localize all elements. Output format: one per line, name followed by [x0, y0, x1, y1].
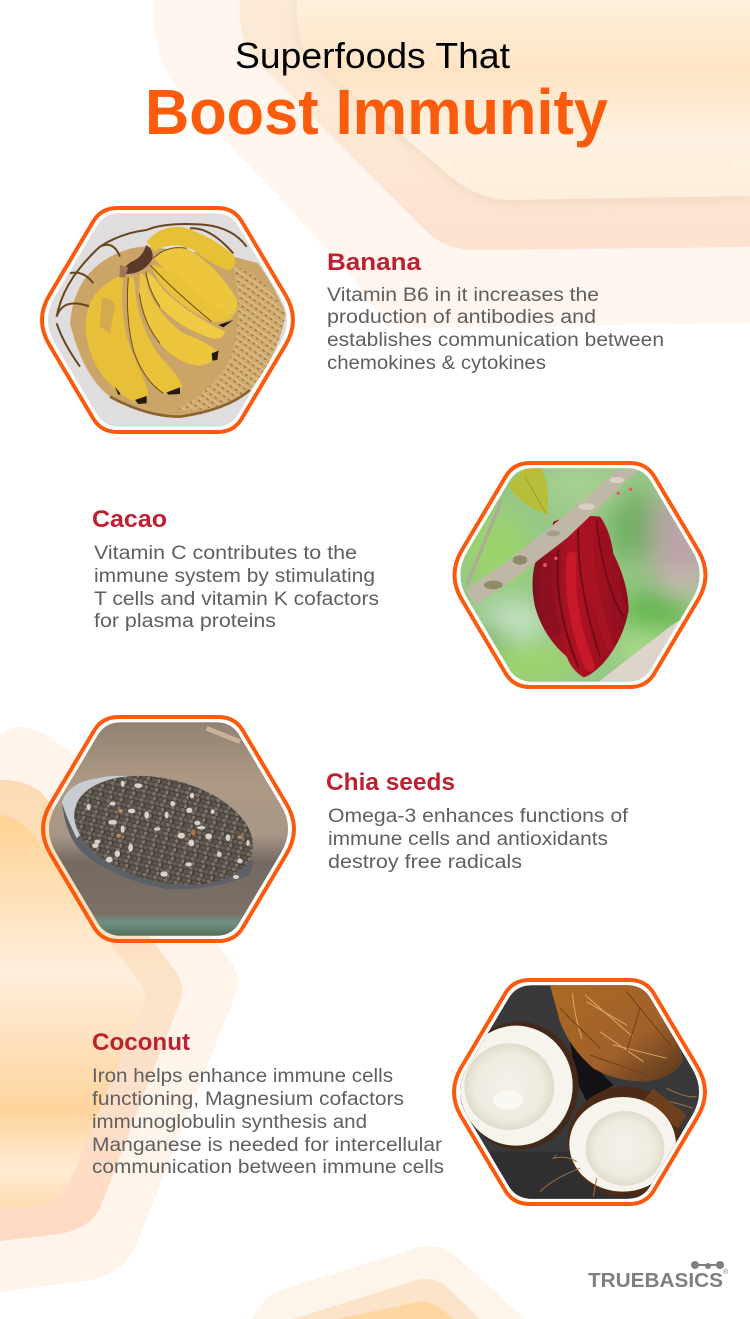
title: Boost Immunity	[145, 76, 608, 148]
text: coconut: functioning, Magnesium cofactors	[92, 1089, 404, 1110]
background shapes: top right	[153, 0, 750, 328]
text: cacao	[94, 543, 379, 632]
logo: TrueBasics: TRUEBASICS	[588, 1269, 723, 1292]
text: chia seeds: destroy free radicals	[328, 852, 522, 873]
text: coconut: communication between immune cells	[92, 1157, 444, 1178]
panel: chia seeds	[40, 714, 629, 946]
hexagon frame: coconut	[454, 980, 705, 1204]
title	[145, 35, 608, 148]
background shapes: bottom	[252, 1246, 525, 1319]
text: cacao: for plasma proteins	[94, 611, 276, 632]
hexagon frame: banana	[42, 208, 293, 432]
panel: banana	[40, 207, 664, 433]
text: banana	[327, 285, 664, 374]
photo: banana basket	[48, 213, 287, 427]
text: chia seeds	[328, 806, 629, 873]
heading: chia seeds: Chia seeds	[326, 769, 455, 796]
logo: TrueBasics: ®	[723, 1268, 729, 1276]
text: chia seeds: immune cells and antioxidants	[328, 829, 608, 850]
text: cacao: immune system by stimulating	[94, 566, 375, 587]
panel: coconut	[92, 976, 710, 1208]
photo: chia seeds on spoon	[48, 722, 288, 936]
text: chia seeds: Omega-3 enhances functions of	[328, 806, 629, 827]
text: cacao: T cells and vitamin K cofactors	[94, 589, 379, 610]
hexagon frame: cacao	[454, 463, 706, 687]
heading: coconut: Coconut	[92, 1029, 190, 1056]
heading: banana: Banana	[327, 249, 422, 276]
photo: coconut halves	[460, 985, 700, 1199]
photo: cacao pod	[460, 468, 700, 682]
heading: cacao: Cacao	[92, 506, 167, 533]
text: coconut: Manganese is needed for intercellular	[92, 1135, 443, 1156]
background shapes: left	[0, 727, 238, 1292]
text: coconut	[92, 1066, 444, 1178]
panel: cacao	[92, 460, 710, 692]
text: coconut: immunoglobulin synthesis and	[92, 1112, 367, 1133]
text: cacao: Vitamin C contributes to the	[94, 543, 357, 564]
title: Superfoods That	[235, 35, 510, 76]
text: coconut: Iron helps enhance immune cells	[92, 1066, 393, 1087]
text: banana: production of antibodies and	[327, 307, 596, 328]
text: banana: chemokines & cytokines	[327, 353, 546, 374]
text: banana: Vitamin B6 in it increases the	[327, 285, 599, 306]
hexagon frame: chia seeds	[43, 717, 294, 941]
text: banana: establishes communication between	[327, 330, 664, 351]
